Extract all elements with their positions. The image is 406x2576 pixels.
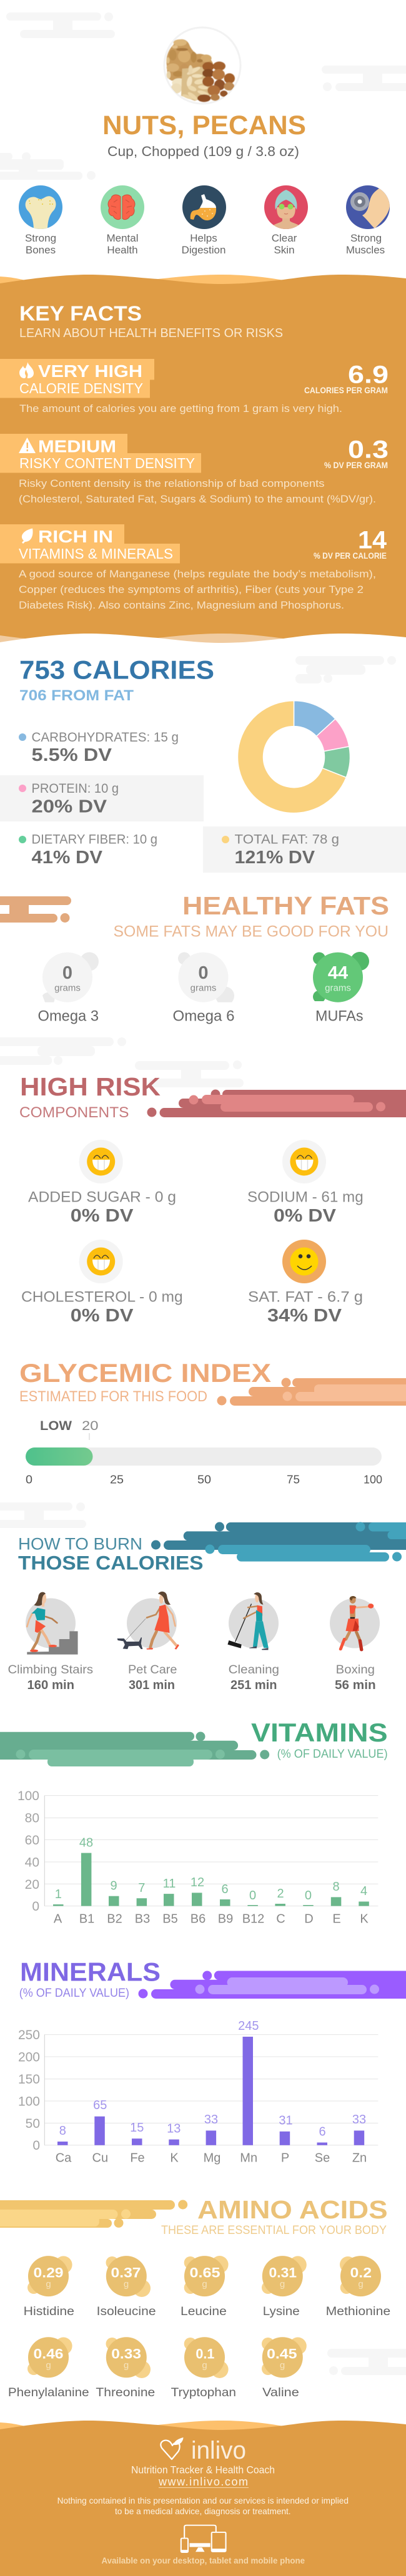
value: 20: 20 (82, 1419, 99, 1433)
bar chart: vitamins: B12 (242, 1912, 264, 1926)
bar chart: vitamins: B9 (218, 1912, 233, 1926)
legend: total fat: 121% DV (235, 848, 315, 868)
bar chart: vitamins: 100 (17, 1789, 39, 1803)
fat: omega 6: 0 (198, 963, 209, 983)
label: vitamins and minerals: VITAMINS & MINERALS (19, 546, 173, 562)
fat: omega 3: 0 (62, 963, 72, 983)
bar chart: vitamins: 48 (79, 1836, 93, 1850)
panel: key facts (0, 287, 406, 646)
component: added sugar: 0% DV (71, 1206, 134, 1226)
logo: inlivo (161, 2437, 246, 2464)
component: cholesterol: CHOLESTEROL - 0 mg (21, 1289, 183, 1306)
bar chart: vitamins: B3 (135, 1912, 150, 1926)
icon: flame (19, 362, 34, 378)
wave: top of footer (0, 2421, 406, 2439)
label: health: Health (107, 244, 138, 256)
subheading: 706 from fat: 706 FROM FAT (19, 687, 134, 704)
legend: carbohydrates: CARBOHYDRATES: 15 g (31, 730, 179, 745)
ribbon: healthy fats (0, 896, 71, 923)
value: 14: 14 (358, 527, 387, 554)
label: digestion: Digestion (182, 244, 225, 256)
amino: phenylalanine: 0.46 (34, 2346, 64, 2362)
description (19, 477, 376, 505)
bar chart: minerals: Ca (56, 2152, 72, 2165)
amino: histidine (24, 2256, 74, 2318)
fat: mufas (313, 952, 369, 1025)
label: clear: Clear (272, 232, 297, 244)
legend: carbohydrates: 5.5% DV (31, 745, 112, 765)
bar chart: minerals: 33 (204, 2113, 218, 2127)
subheading: components: COMPONENTS (19, 1104, 129, 1121)
amino: tryptophan: 0.1 (196, 2346, 214, 2362)
fact: rich in vitamins (0, 524, 387, 611)
wave: bottom of key facts (0, 634, 406, 652)
description: Copper (reduces the symptoms of arthritis), Fiber (cuts your Type 2 (19, 584, 364, 595)
description (19, 568, 376, 611)
bar chart: vitamins: 4 (360, 1884, 367, 1898)
ribbon: glycemic (217, 1378, 406, 1406)
amino: histidine: g (46, 2279, 51, 2290)
heading: 753 calories: 753 CALORIES (19, 655, 214, 684)
bar chart: vitamins: 0 (249, 1889, 256, 1903)
wave: top of key facts (0, 275, 406, 293)
level: rich in: RICH IN (38, 527, 113, 546)
heading: amino acids: AMINO ACIDS (197, 2195, 388, 2224)
ribbon: amino acids (0, 2200, 187, 2228)
activity: boxing (330, 1596, 380, 1650)
amino: lysine (262, 2256, 307, 2318)
disclaimer (57, 2495, 349, 2516)
panel: minerals (18, 1957, 406, 2165)
bar chart: vitamins: 40 (25, 1855, 39, 1870)
panel: amino acids (0, 2195, 390, 2399)
bar chart: vitamins: 11 (163, 1877, 176, 1891)
bar chart: minerals: Cu (92, 2152, 108, 2165)
bar chart: vitamins: 80 (25, 1811, 39, 1825)
subheading: ESTIMATED FOR THIS FOOD (19, 1388, 207, 1405)
legend: protein: 20% DV (31, 796, 107, 816)
fat: omega 6: Omega 6 (172, 1007, 235, 1025)
amino: isoleucine (97, 2256, 156, 2318)
component: added sugar: ADDED SUGAR - 0 g (28, 1189, 176, 1206)
value: 251 min: 251 min (230, 1678, 277, 1692)
bar chart: minerals: 13 (167, 2122, 181, 2135)
food photo: mixed nuts (164, 27, 240, 104)
bar chart: vitamins: B5 (162, 1912, 178, 1926)
ribbon: high risk (147, 1090, 406, 1117)
amino: isoleucine: 0.37 (111, 2265, 141, 2281)
subheading: LEARN ABOUT HEALTH BENEFITS OR RISKS (19, 326, 283, 340)
bar chart: minerals: Mn (240, 2152, 257, 2165)
amino: lysine: 0.31 (269, 2265, 297, 2281)
ribbon: vitamins (0, 1731, 269, 1766)
level: medium: MEDIUM (38, 437, 116, 456)
amino: threonine: Threonine (96, 2386, 155, 2399)
unit: calories per gram: CALORIES PER GRAM (304, 385, 388, 395)
component: sodium (247, 1140, 364, 1226)
description: Risky Content density is the relationship of bad components (19, 477, 325, 489)
bar chart: vitamins (17, 1789, 378, 1926)
bar chart: minerals: Fe (130, 2152, 145, 2165)
description: Diabetes Risk). Also contains Zinc, Magnesium and Phosphorus. (19, 599, 344, 611)
amino: phenylalanine (8, 2337, 89, 2399)
amino: methionine: Methionine (326, 2305, 390, 2318)
bar chart: vitamins: C (276, 1912, 285, 1926)
fact: calorie density (0, 359, 389, 414)
fat: mufas: MUFAs (315, 1007, 364, 1025)
bar chart: minerals: 65 (93, 2099, 107, 2112)
fat: omega 3: Omega 3 (37, 1007, 99, 1025)
heading: healthy fats: HEALTHY FATS (182, 891, 389, 920)
gauge axis labels (26, 1473, 382, 1486)
bar chart: minerals: K (170, 2152, 179, 2165)
component: added sugar (28, 1140, 176, 1226)
bar chart: minerals (18, 2019, 378, 2165)
amino: valine: Valine (262, 2386, 299, 2399)
icon: leaf (22, 528, 32, 544)
amino: leucine: Leucine (181, 2305, 227, 2318)
legend: dietary fiber: 41% DV (31, 848, 103, 868)
fat: omega 6: grams (191, 982, 216, 994)
subheading: (% OF DAILY VALUE) (277, 1747, 388, 1761)
amino: lysine: Lysine (263, 2305, 300, 2318)
disclaimer: to be a medical advice, diagnosis or treatment. (115, 2506, 291, 2516)
amino: threonine (96, 2337, 155, 2399)
panel: glycemic index (19, 1358, 406, 1486)
value: 6.9: 6.9 (348, 361, 389, 388)
bar chart: minerals: 150 (18, 2072, 40, 2087)
bar chart: vitamins: 60 (25, 1833, 39, 1848)
bar chart: minerals: 200 (18, 2050, 40, 2065)
amino: threonine: 0.33 (111, 2346, 141, 2362)
amino: leucine: 0.65 (190, 2265, 220, 2281)
bar chart: minerals: Se (315, 2152, 330, 2165)
bar chart: minerals: 0 (32, 2138, 40, 2153)
description: A good source of Manganese (helps regulate the body’s metabolism), (19, 568, 376, 580)
legend: dietary fiber: DIETARY FIBER: 10 g (31, 833, 157, 846)
value: 160 min: 160 min (27, 1678, 74, 1692)
panel: healthy fats (0, 891, 389, 1025)
label: risky content density: RISKY CONTENT DENSITY (19, 455, 195, 471)
gauge axis labels: 50 (197, 1473, 211, 1486)
label: cleaning: Cleaning (229, 1663, 279, 1677)
component: saturated fat: SAT. FAT - 6.7 g (248, 1289, 363, 1306)
heading: high risk: HIGH RISK (20, 1072, 161, 1101)
bar chart: vitamins: B1 (79, 1912, 94, 1926)
label: helps: Helps (190, 232, 217, 244)
gauge axis labels: 25 (110, 1473, 124, 1486)
bar chart: vitamins: 9 (110, 1879, 117, 1893)
component: cholesterol: 0% DV (71, 1306, 134, 1326)
legend: protein (0, 775, 204, 821)
heading: those calories: THOSE CALORIES (18, 1552, 204, 1574)
bar chart: vitamins: B2 (107, 1912, 122, 1926)
amino: methionine: 0.2 (350, 2265, 372, 2281)
bar chart: minerals: Zn (352, 2152, 367, 2165)
fat: mufas: grams (325, 982, 351, 994)
label: low: LOW (40, 1419, 72, 1433)
activity: climbing stairs (26, 1592, 78, 1655)
icon: helps digestion (182, 185, 226, 229)
subheading: THESE ARE ESSENTIAL FOR YOUR BODY (161, 2224, 387, 2237)
panel: vitamins (0, 1718, 388, 1926)
available on: Available on your desktop, tablet and mobile phone (101, 2555, 305, 2565)
bar chart: vitamins: 0 (305, 1889, 312, 1903)
amino: valine: g (280, 2360, 285, 2371)
label: bones: Bones (26, 244, 56, 256)
icon: devices (181, 2525, 226, 2552)
bar chart: minerals: 245 (238, 2019, 259, 2033)
label: strong: Strong (350, 232, 382, 244)
ribbon: burn (151, 1522, 406, 1562)
tagline: Nutrition Tracker & Health Coach (131, 2464, 275, 2476)
bar chart: minerals: 6 (319, 2125, 326, 2138)
disclaimer: Nothing contained in this presentation and our services is intended or implied (57, 2495, 349, 2505)
activity: pet care (117, 1592, 179, 1650)
icon: mental health (101, 185, 144, 229)
fat: omega 3: grams (54, 982, 81, 994)
amino: methionine (326, 2256, 390, 2318)
value: 301 min: 301 min (129, 1678, 175, 1692)
panel: health benefits icons (19, 185, 390, 256)
bar chart: minerals: 15 (130, 2121, 144, 2135)
bar chart: minerals: Mg (204, 2152, 220, 2165)
icon: warning (19, 438, 36, 453)
subheading: SOME FATS MAY BE GOOD FOR YOU (114, 923, 389, 940)
logo: inlivo: inlivo (191, 2437, 246, 2464)
heading: how to burn: HOW TO BURN (18, 1535, 142, 1554)
amino: histidine: Histidine (24, 2305, 74, 2318)
amino: isoleucine: g (124, 2279, 129, 2290)
legend: carbohydrates (19, 730, 179, 765)
amino: leucine: g (202, 2279, 207, 2290)
gauge axis labels: 75 (287, 1473, 300, 1486)
panel: footer (0, 2434, 406, 2576)
bar chart: minerals: 100 (18, 2095, 40, 2108)
amino: leucine (181, 2256, 229, 2318)
bar chart: minerals: P (281, 2152, 289, 2165)
bar chart: minerals: 33 (352, 2113, 366, 2127)
unit: % dv per gram: % DV PER GRAM (324, 460, 388, 470)
activity: cleaning (227, 1592, 279, 1650)
label: muscles: Muscles (346, 244, 385, 256)
bar chart: vitamins: 6 (221, 1883, 229, 1896)
panel: high risk components (19, 1072, 406, 1326)
label: strong bones: Strong (25, 232, 56, 244)
bar chart: minerals: 8 (59, 2124, 66, 2138)
bar chart: vitamins: A (54, 1912, 62, 1926)
gauge axis labels: 0 (26, 1473, 32, 1486)
fat: omega 6 (172, 953, 235, 1025)
component: cholesterol (21, 1240, 183, 1326)
bar chart: vitamins: B6 (191, 1912, 205, 1926)
legend: protein: PROTEIN: 10 g (31, 781, 119, 796)
component: saturated fat: 34% DV (267, 1306, 342, 1326)
amino: tryptophan: Tryptophan (171, 2386, 236, 2399)
title: NUTS, PECANS (102, 110, 306, 140)
label: mental: Mental (106, 232, 139, 244)
bar chart: vitamins: 7 (138, 1881, 145, 1895)
heading: minerals: MINERALS (20, 1957, 161, 1987)
amino: histidine: 0.29 (34, 2265, 64, 2281)
bar chart: vitamins: 8 (332, 1880, 340, 1894)
label: calorie density: CALORIE DENSITY (19, 380, 143, 396)
legend: total fat: TOTAL FAT: 78 g (235, 833, 339, 846)
bar chart: vitamins: 2 (277, 1887, 284, 1901)
subheading: (% OF DAILY VALUE) (19, 1986, 129, 2000)
icon: strong muscles (346, 185, 390, 229)
bar chart: vitamins: 12 (191, 1876, 204, 1889)
heading: vitamins: VITAMINS (251, 1718, 388, 1747)
bar chart: vitamins: 1 (55, 1888, 62, 1901)
icon: strong bones (19, 185, 62, 231)
label: boxing: Boxing (336, 1663, 375, 1677)
amino: tryptophan: g (202, 2360, 207, 2371)
bar chart: vitamins: 0 (32, 1899, 39, 1914)
amino: phenylalanine: Phenylalanine (8, 2386, 89, 2399)
value: 56 min: 56 min (335, 1678, 376, 1692)
amino: isoleucine: Isoleucine (97, 2305, 156, 2318)
amino: methionine: g (358, 2279, 364, 2290)
amino: valine (262, 2337, 307, 2399)
bar chart: minerals: 50 (26, 2117, 40, 2131)
donut chart (237, 701, 350, 813)
label: climbing stairs: Climbing Stairs (7, 1663, 93, 1677)
legend: total fat (203, 826, 406, 873)
panel: calories (0, 655, 406, 873)
bar chart: vitamins: 20 (25, 1878, 39, 1892)
bar chart: vitamins: K (360, 1912, 369, 1926)
amino: threonine: g (124, 2360, 129, 2371)
amino: phenylalanine: g (46, 2360, 51, 2371)
description: The amount of calories you are getting from 1 gram is very high. (19, 403, 342, 414)
amino: valine: 0.45 (267, 2346, 297, 2362)
legend: dietary fiber (19, 833, 157, 868)
description: (Cholesterol, Saturated Fat, Sugars & Sodium) to the amount (%DV/gr). (19, 493, 376, 505)
level: very high: VERY HIGH (38, 361, 142, 381)
component: sodium: 0% DV (274, 1206, 337, 1226)
gauge axis labels: 100 (364, 1473, 382, 1486)
website: www.inlivo.com (158, 2476, 248, 2488)
heading: key facts: KEY FACTS (19, 302, 142, 325)
label: skin: Skin (274, 244, 295, 256)
bar chart: minerals: 31 (279, 2114, 293, 2128)
component: saturated fat (248, 1240, 363, 1326)
icon: clear skin (264, 185, 308, 230)
gauge bar (26, 1433, 382, 1466)
fat: omega 3 (37, 953, 99, 1025)
bar chart: vitamins: E (332, 1912, 341, 1926)
fact: risky content density (0, 434, 389, 505)
amino: lysine: g (280, 2279, 285, 2290)
amino: tryptophan (171, 2337, 236, 2399)
fat: mufas: 44 (328, 963, 348, 983)
value: 0.3: 0.3 (348, 436, 389, 463)
ribbon: minerals (139, 1971, 406, 1999)
unit: % dv per calorie: % DV PER CALORIE (314, 551, 387, 561)
bar chart: vitamins: D (304, 1912, 314, 1926)
serving size: Cup, Chopped (109 g / 3.8 oz) (107, 144, 299, 159)
bar chart: minerals: 250 (18, 2028, 40, 2042)
label: pet care: Pet Care (128, 1663, 177, 1677)
panel: how to burn those calories (7, 1522, 406, 1692)
component: sodium: SODIUM - 61 mg (247, 1189, 364, 1206)
heading: glycemic index: GLYCEMIC INDEX (19, 1358, 271, 1388)
